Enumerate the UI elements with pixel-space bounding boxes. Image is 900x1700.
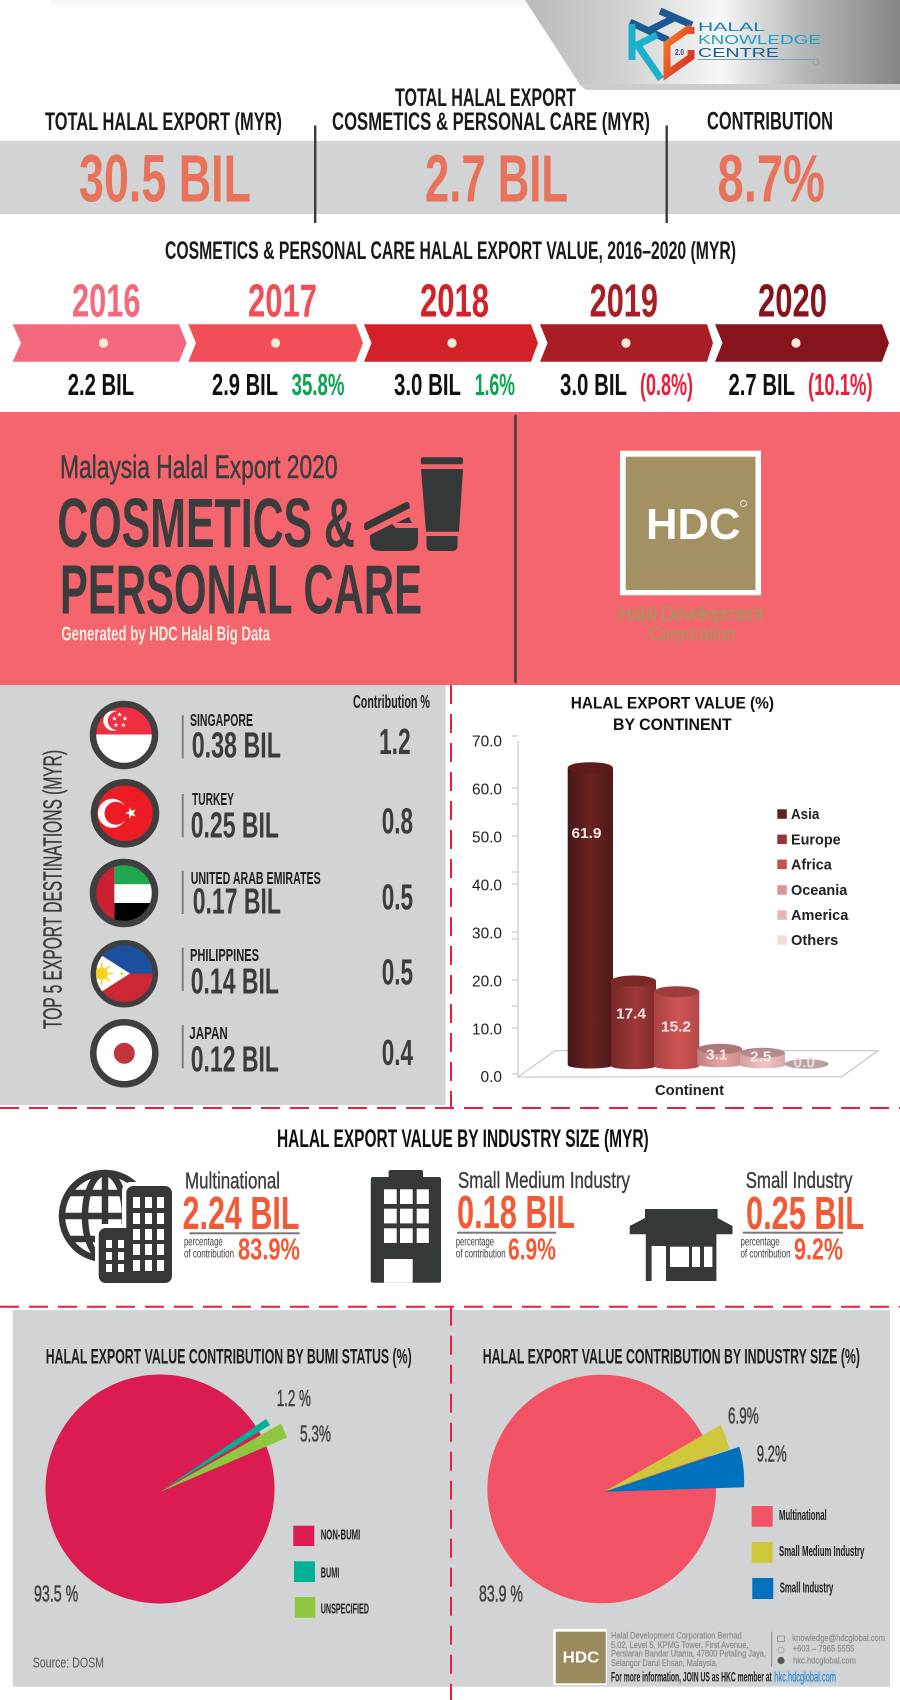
stat: contribution: 8.7%: [718, 142, 825, 216]
chart legend: Oceania: [791, 882, 848, 899]
year 2018: 1.6%: [475, 368, 515, 402]
row: Singapore: 0.38 BIL: [192, 725, 281, 766]
chart floor: [518, 1051, 878, 1077]
row: Singapore: 1.2: [379, 721, 411, 762]
subtitle: Malaysia Halal Export 2020: [60, 449, 338, 485]
bar: America: [740, 1048, 785, 1068]
icon: cosmetics tube and jar: [364, 457, 463, 551]
year 2019: (0.8%): [640, 368, 693, 402]
chart legend: Others: [791, 932, 838, 949]
bar: Africa: 15.2: [661, 1019, 691, 1036]
dashed section dividers: [0, 685, 900, 1700]
bar: Others: 0.0: [794, 1054, 815, 1071]
row: United Arab Emirates: 0.5: [382, 876, 413, 917]
HDC caption: [618, 604, 764, 646]
address: Persiaran Bandar Utama, 47800 Petaling Jaya,: [611, 1649, 766, 1660]
pie labels: 6.9%: [728, 1402, 759, 1428]
section: export value by industry size: [62, 1125, 864, 1287]
year 2017: [188, 274, 363, 402]
pie slices: [487, 1375, 744, 1603]
HDC caption: Halal Development: [618, 604, 764, 626]
address: Selangor Darul Ehsan, Malaysia.: [611, 1658, 718, 1669]
year 2019: 2019: [590, 274, 658, 326]
main title: COSMETICS &: [57, 484, 355, 562]
pie legend: Multinational: [779, 1507, 827, 1524]
chart legend: Asia: [791, 806, 820, 823]
icon: shop: [630, 1209, 732, 1281]
pie legend: NON-BUMI: [321, 1526, 360, 1543]
pie labels: [34, 1385, 331, 1607]
logo: Halal Knowledge Centre: 2.0: [675, 48, 684, 57]
industry: small medium: 6.9%: [508, 1231, 556, 1266]
bar: Europe: 17.4: [616, 1005, 647, 1022]
bar: Asia: 61.9: [572, 825, 602, 842]
industry: small: Small Industry: [746, 1167, 853, 1193]
HDC caption: Corporation: [649, 624, 736, 646]
pie chart: industry size: [479, 1344, 865, 1607]
chart legend: Europe: [791, 831, 841, 848]
icon: globe and buildings: [62, 1173, 176, 1287]
stat: cosmetics export: 2.7 BIL: [425, 142, 568, 216]
flag: Turkey: [90, 780, 160, 850]
industry: multinational: 2.24 BIL: [182, 1187, 300, 1239]
flag: UAE: [90, 860, 164, 928]
row: Singapore: SINGAPORE: [190, 710, 253, 730]
industry: small: [630, 1167, 864, 1281]
vertical heading: TOP 5 EXPORT DESTINATIONS (MYR): [38, 750, 68, 1029]
pie legend: BUMI: [321, 1564, 339, 1581]
chart legend: [777, 806, 849, 949]
logo: Halal Knowledge Centre: HALAL: [698, 20, 766, 34]
year 2016: [13, 274, 187, 402]
industry: multinational: of contribution: [184, 1246, 234, 1260]
row: Philippines: 0.5: [382, 951, 413, 992]
flag: Japan: [93, 1022, 155, 1084]
row: Turkey: [90, 780, 413, 850]
HDC footer logo: [553, 1629, 607, 1685]
stat: contribution: [707, 108, 833, 216]
y axis: 30.0: [472, 926, 502, 942]
x axis label: Continent: [655, 1082, 724, 1099]
chart title: BY CONTINENT: [613, 715, 732, 734]
address: Halal Development Corporation Berhad: [611, 1630, 742, 1641]
year 2018: 3.0 BIL: [394, 368, 461, 402]
headline stats panel: [0, 84, 900, 223]
HDC footer logo: HDC: [563, 1650, 600, 1667]
industry: small medium: [371, 1167, 630, 1283]
industry: small: percentage: [740, 1235, 780, 1249]
chart title: HALAL EXPORT VALUE (%): [571, 693, 774, 712]
industry: small: 9.2%: [794, 1231, 843, 1266]
row: Japan: [93, 1022, 413, 1084]
chart legend: Africa: [791, 856, 832, 873]
HDC logo: HDC: [646, 500, 740, 549]
row: Japan: 0.12 BIL: [191, 1039, 279, 1080]
membership note: hkc.hdcglobal.com: [774, 1669, 836, 1685]
y axis: 60.0: [472, 782, 502, 798]
row: Japan: 0.4: [382, 1032, 413, 1073]
address: [611, 1630, 766, 1669]
pie labels: 9.2%: [757, 1440, 787, 1466]
stat: total halal export: [45, 108, 282, 216]
industry: multinational: 83.9%: [238, 1231, 300, 1266]
row: Turkey: TURKEY: [192, 789, 234, 809]
row: United Arab Emirates: 0.17 BIL: [193, 880, 281, 921]
chart title: [571, 693, 774, 734]
HDC logo: [620, 451, 761, 595]
bar: Oceania: [697, 1044, 742, 1067]
generated by note: Generated by HDC Halal Big Data: [61, 624, 271, 646]
bar: America: 2.5: [750, 1049, 772, 1066]
year 2017: 2017: [248, 274, 317, 326]
logo: Halal Knowledge Centre: [630, 11, 821, 79]
chart legend: America: [791, 907, 849, 924]
bar: Africa: [654, 986, 699, 1069]
pie chart: bumi status: UNSPECIFIED: [321, 1600, 369, 1617]
contribution column heading: Contribution %: [353, 692, 430, 712]
year 2017: 2.9 BIL: [212, 368, 278, 402]
y axis: 40.0: [472, 878, 502, 894]
section heading: HALAL EXPORT VALUE BY INDUSTRY SIZE (MYR): [277, 1125, 649, 1153]
main title: PERSONAL CARE: [60, 550, 422, 628]
y axis: 10.0: [472, 1022, 502, 1038]
stat: contribution: CONTRIBUTION: [707, 108, 833, 136]
pie title: HALAL EXPORT VALUE CONTRIBUTION BY BUMI STATUS (%): [46, 1344, 412, 1368]
year 2020: [715, 274, 889, 402]
contact details: +603 – 7965 5555: [793, 1644, 854, 1655]
row: Japan: JAPAN: [189, 1023, 228, 1043]
header banner with logo: [50, 0, 900, 90]
industry: small medium: 0.18 BIL: [457, 1186, 575, 1238]
industry: small medium: Small Medium Industry: [458, 1167, 630, 1193]
industry: multinational: [62, 1167, 300, 1287]
footer: contact block: [553, 1629, 885, 1685]
year 2016: 2016: [72, 274, 140, 326]
bar: Oceania: 3.1: [706, 1046, 728, 1063]
icon: office building: [371, 1170, 441, 1283]
pie slices: [46, 1374, 287, 1604]
pie labels: [479, 1402, 787, 1607]
year 2020: 2020: [758, 274, 827, 326]
source note: Source: DOSM: [33, 1655, 104, 1672]
stat: total halal export: 30.5 BIL: [79, 142, 251, 216]
bar: Others: [784, 1054, 829, 1071]
logo: Halal Knowledge Centre: KNOWLEDGE: [698, 32, 821, 47]
stat: cosmetics export: [332, 84, 650, 216]
pie labels: 83.9 %: [479, 1581, 523, 1607]
panel: top 5 export destinations: [0, 685, 446, 1105]
row: Philippines: PHILIPPINES: [190, 945, 259, 965]
panel: title banner: [0, 412, 900, 685]
panel: pie charts background: [13, 1310, 890, 1687]
industry: multinational: percentage: [184, 1235, 223, 1249]
year 2020: 2.7 BIL: [728, 368, 795, 402]
pie legend: [752, 1506, 865, 1599]
pie labels: 5.3%: [300, 1421, 331, 1447]
industry: small medium: of contribution: [456, 1246, 506, 1260]
year 2016: 2.2 BIL: [68, 368, 134, 402]
year 2018: [364, 274, 538, 402]
y axis: [472, 734, 518, 1086]
row: Philippines: 0.14 BIL: [191, 960, 279, 1001]
pie labels: 93.5 %: [34, 1581, 78, 1607]
y axis: 70.0: [472, 734, 502, 750]
timeline: export value 2016-2020: [13, 237, 889, 402]
stat: cosmetics export: COSMETICS & PERSONAL CARE (MYR): [332, 108, 650, 136]
row: Turkey: 0.25 BIL: [191, 804, 279, 845]
bar: Europe: [611, 976, 656, 1069]
industry: small: of contribution: [740, 1246, 790, 1260]
pie labels: 1.2 %: [277, 1385, 311, 1411]
stat: cosmetics export: TOTAL HALAL EXPORT: [395, 84, 576, 112]
contact details: [777, 1633, 885, 1666]
stat: total halal export: TOTAL HALAL EXPORT (MYR): [45, 108, 282, 136]
pie legend: Small Industry: [780, 1580, 834, 1597]
flag: Philippines: [90, 940, 160, 1008]
row: Singapore: [90, 700, 411, 770]
row: Philippines: [90, 940, 413, 1008]
main title: [57, 484, 422, 628]
chart: halal export value by continent: [472, 693, 878, 1099]
row: Turkey: 0.8: [382, 800, 413, 841]
y axis: 20.0: [472, 974, 502, 990]
year 2019: 3.0 BIL: [560, 368, 627, 402]
y axis: 0.0: [480, 1069, 502, 1086]
contact details: hkc.hdcglobal.com: [793, 1655, 856, 1666]
pie chart: bumi status: [33, 1344, 412, 1672]
year 2017: 35.8%: [292, 368, 344, 402]
flag: Singapore: [90, 700, 160, 770]
industry: small medium: percentage: [456, 1235, 494, 1249]
pie legend: [293, 1526, 369, 1618]
industry: multinational: Multinational: [185, 1167, 280, 1193]
y axis: 50.0: [472, 830, 502, 846]
bar: Asia: [568, 762, 613, 1069]
year 2019: [540, 274, 713, 402]
row: United Arab Emirates: UNITED ARAB EMIRATES: [191, 868, 321, 888]
logo: Halal Knowledge Centre: CENTRE: [698, 45, 779, 60]
year 2018: 2018: [420, 274, 489, 326]
row: United Arab Emirates: [90, 860, 413, 928]
address: 5.02, Level 5, KPMG Tower, First Avenue,: [611, 1640, 748, 1651]
